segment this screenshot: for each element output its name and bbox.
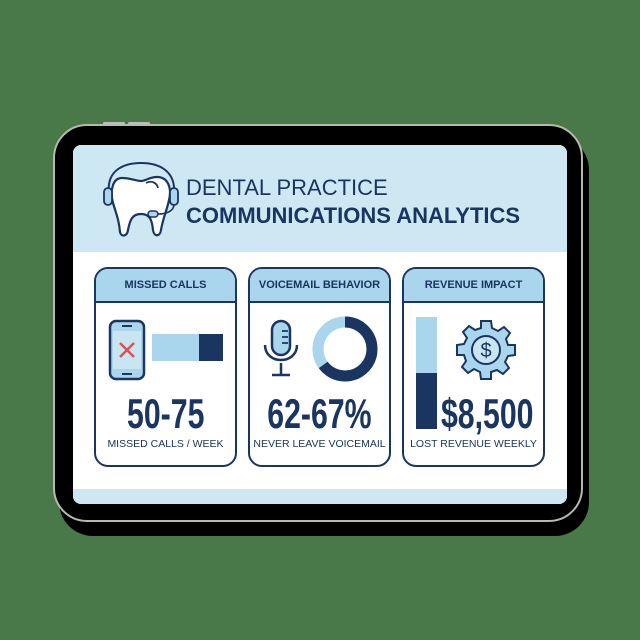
panel: revenue: REVENUE IMPACT	[425, 279, 522, 291]
panel: voicemail	[248, 267, 391, 467]
tablet	[53, 122, 589, 536]
stat number: 62-67%	[267, 390, 372, 437]
panel: revenue	[402, 267, 545, 467]
icon: gear dollar: $	[480, 340, 492, 362]
bar chart vertical	[416, 317, 437, 373]
donut chart	[312, 316, 378, 382]
icon: microphone	[264, 320, 298, 376]
stat number: $8,500	[441, 390, 534, 437]
label: MISSED CALLS / WEEK	[107, 438, 224, 450]
title	[186, 175, 520, 228]
label: NEVER LEAVE VOICEMAIL	[253, 438, 386, 450]
panel: voicemail: VOICEMAIL BEHAVIOR	[259, 279, 380, 291]
panel: missed calls	[94, 267, 237, 467]
title: DENTAL PRACTICE	[186, 175, 388, 200]
icon: tooth with headset	[103, 162, 179, 237]
panel: missed calls: MISSED CALLS	[125, 279, 206, 291]
stat number: 50-75	[127, 390, 204, 437]
icon: phone with x	[108, 320, 146, 380]
bar chart	[152, 334, 199, 361]
label: LOST REVENUE WEEKLY	[410, 438, 537, 450]
icon: gear dollar	[456, 320, 516, 380]
screen	[73, 145, 567, 504]
title: COMMUNICATIONS ANALYTICS	[186, 203, 520, 228]
